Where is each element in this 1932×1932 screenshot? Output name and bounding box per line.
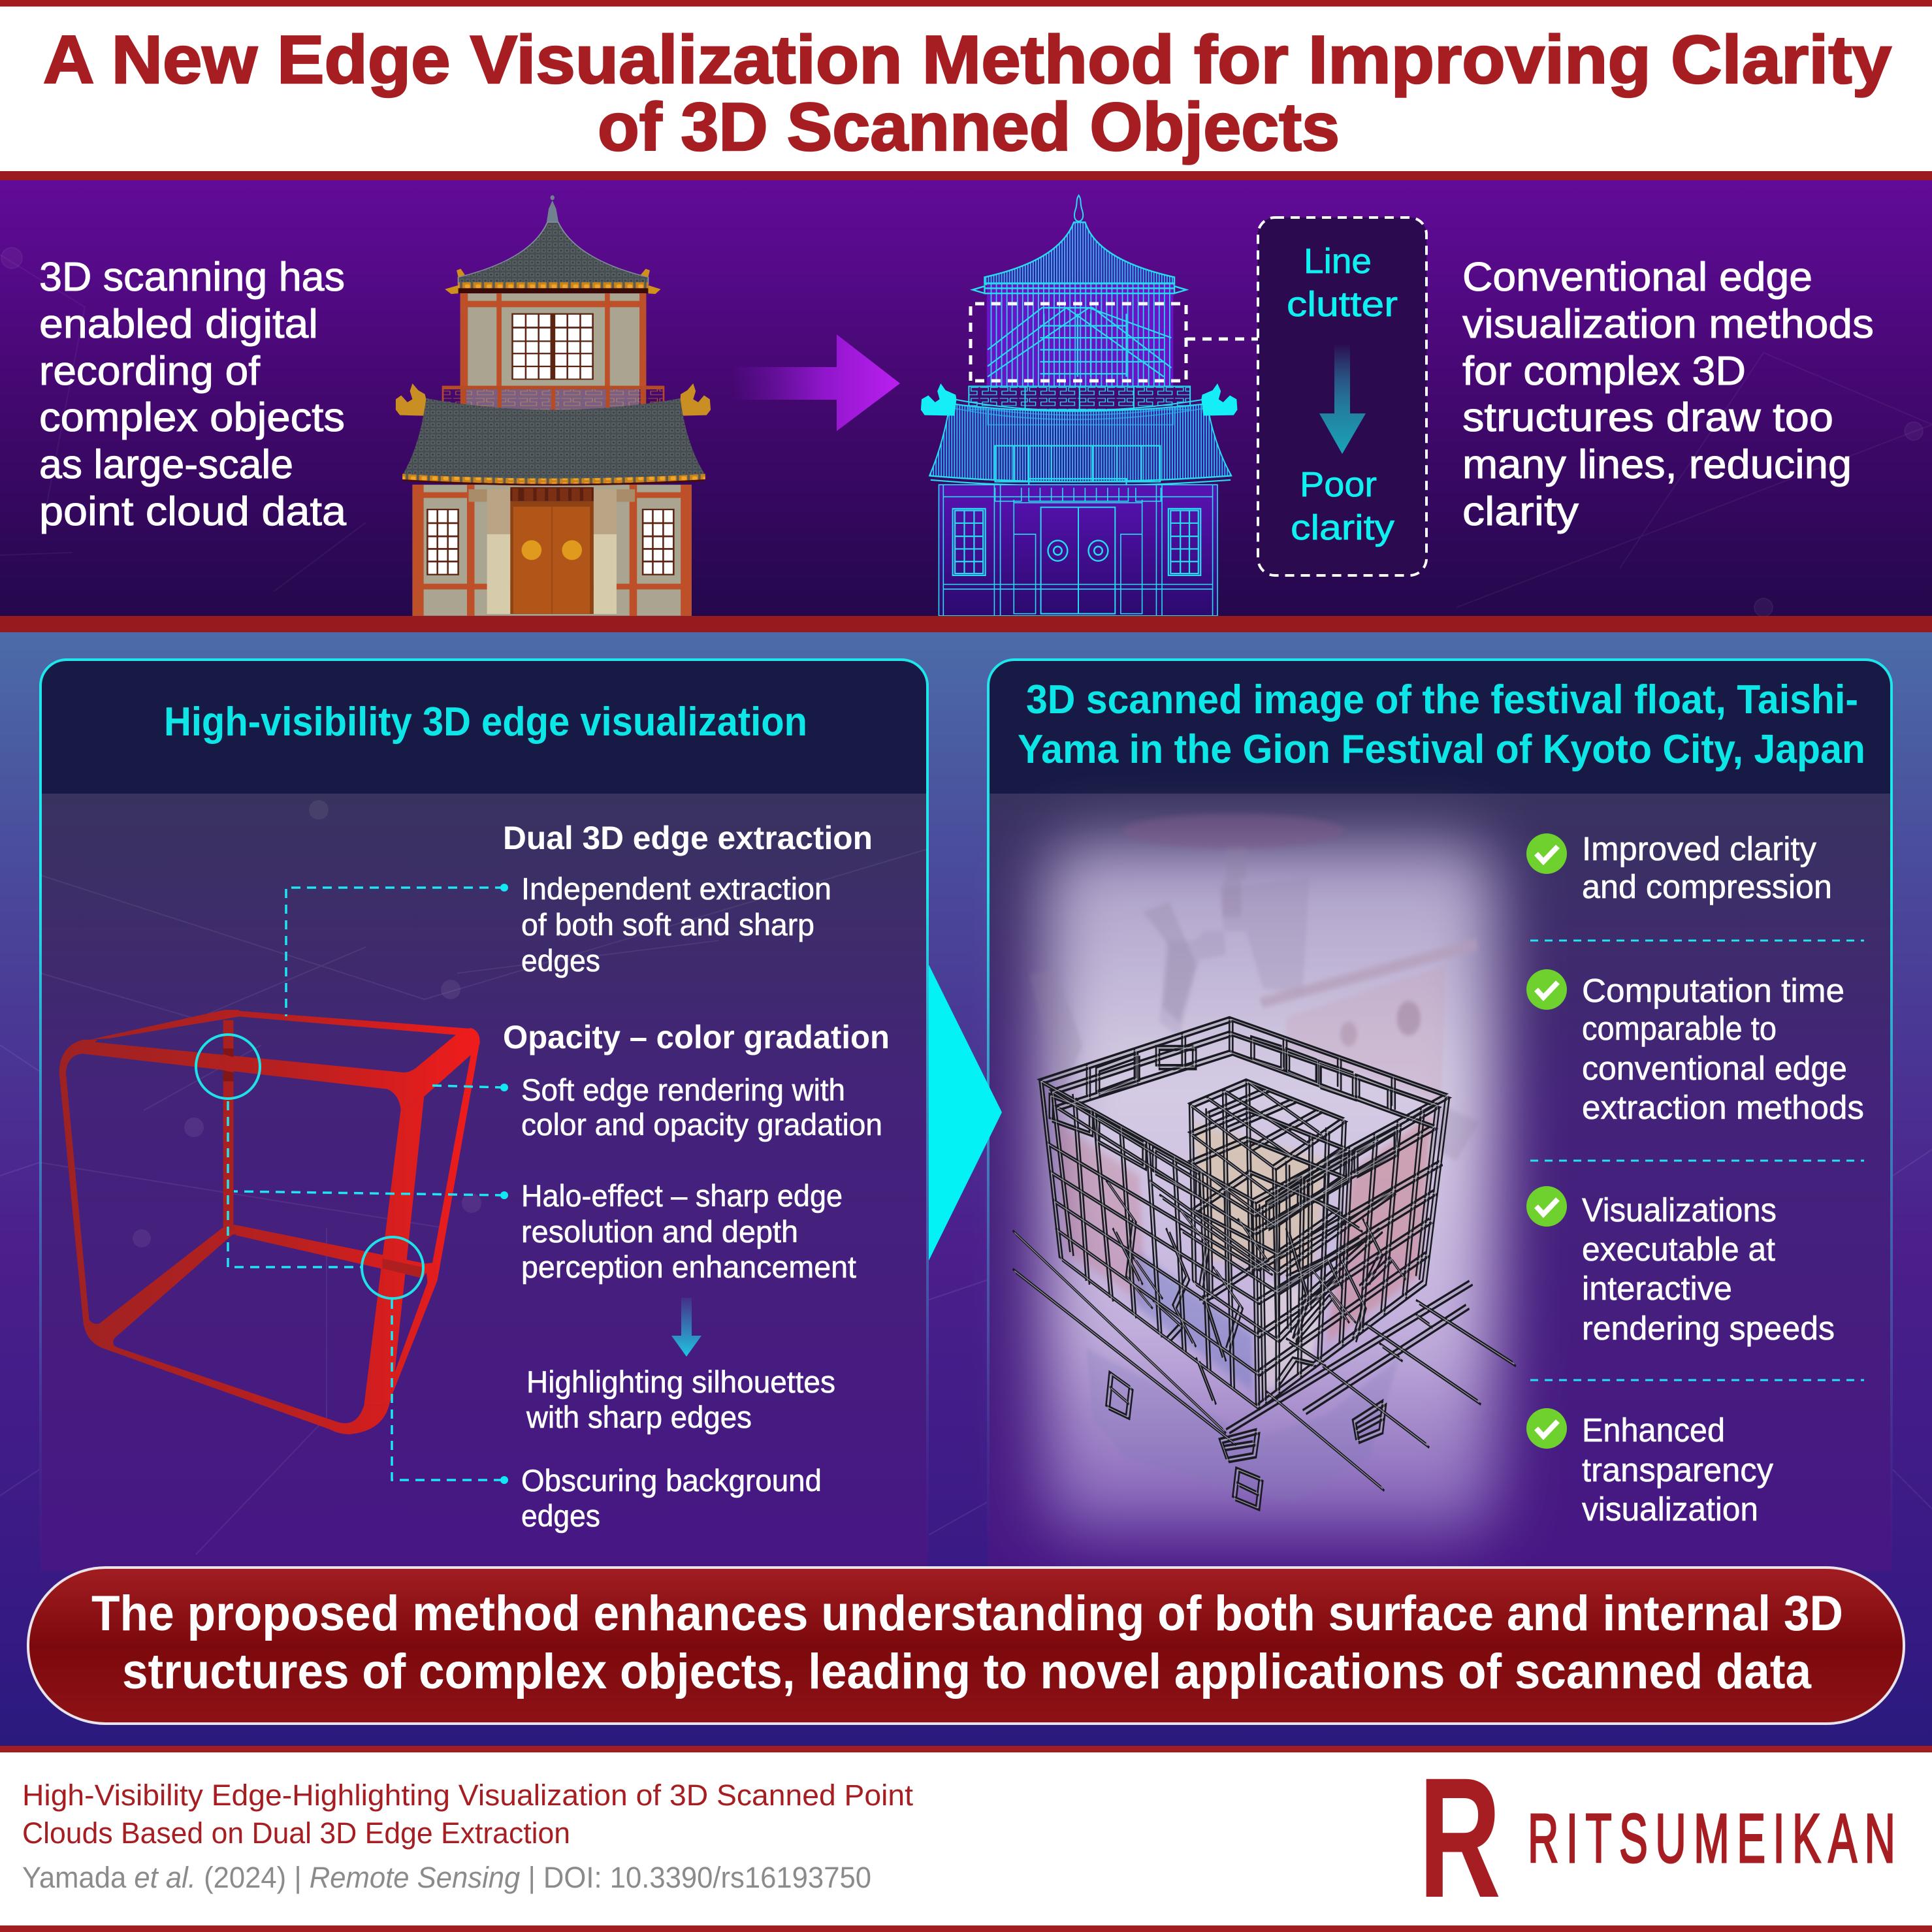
text: intro left: 3D scanning has xyxy=(39,255,345,300)
image: scanned festival float xyxy=(1013,814,1516,1535)
highlight box xyxy=(971,304,1258,381)
text: soft edge xyxy=(521,1072,882,1142)
citation title: High-Visibility Edge-Highlighting Visualization of 3D Scanned Point xyxy=(22,1779,914,1812)
text: soft edge: color and opacity gradation xyxy=(521,1107,882,1142)
text: enhanced transparency: Enhanced xyxy=(1582,1411,1725,1449)
text: independent extraction: Independent extraction xyxy=(521,871,831,906)
title: A New Edge Visualization Method for Improving Clarity xyxy=(43,22,1892,98)
heading: right panel: Yama in the Gion Festival of Kyoto City, Japan xyxy=(1018,727,1865,772)
wire: door ornaments xyxy=(1048,541,1108,561)
ground floor xyxy=(412,485,692,616)
panel: left visualization xyxy=(40,660,927,1571)
text: halo effect: Halo-effect – sharp edge xyxy=(521,1178,843,1213)
icon: wire left dragon xyxy=(921,383,956,416)
upper window xyxy=(511,313,594,379)
text: improved clarity: and compression xyxy=(1582,868,1832,905)
arrow: down xyxy=(1319,344,1366,454)
bottom red stripe xyxy=(0,1925,1932,1932)
icon: upper roof ornaments xyxy=(445,269,661,294)
subheading: opacity: Opacity – color gradation xyxy=(503,1019,890,1055)
left window xyxy=(427,509,459,575)
text: halo effect: resolution and depth xyxy=(521,1214,798,1249)
callout text top: clutter xyxy=(1287,285,1398,324)
panel: right results xyxy=(988,660,1892,1571)
footer stripe xyxy=(0,1746,1932,1752)
text: halo effect: perception enhancement xyxy=(521,1249,856,1284)
icon: check xyxy=(1526,969,1567,1010)
icon: wire right dragon xyxy=(1201,383,1237,416)
callout text bottom xyxy=(1291,465,1394,547)
text: visualizations: Visualizations xyxy=(1582,1191,1777,1229)
text: enhanced transparency xyxy=(1582,1411,1773,1528)
icon: check xyxy=(1526,833,1567,874)
logo: Ritsumeikan: R xyxy=(1419,1742,1501,1932)
text: intro right xyxy=(1462,255,1874,534)
text: independent extraction xyxy=(521,871,831,978)
icon: finial xyxy=(547,195,558,223)
right window xyxy=(642,509,675,575)
text: computation time: conventional edge xyxy=(1582,1050,1847,1087)
leader lines xyxy=(228,884,508,1484)
text: computation time: Computation time xyxy=(1582,972,1844,1009)
text: intro right: clarity xyxy=(1462,489,1579,534)
title: of 3D Scanned Objects xyxy=(598,89,1340,165)
text: intro left: as large-scale xyxy=(39,442,293,487)
text: halo effect xyxy=(521,1178,856,1284)
text: obscuring: Obscuring background xyxy=(521,1463,822,1498)
upper eave band xyxy=(459,282,648,293)
text: intro left: complex objects xyxy=(39,395,345,440)
wire: upper storey xyxy=(973,283,1186,386)
text: intro right: for complex 3D xyxy=(1462,349,1746,394)
callout text bottom: Poor xyxy=(1300,465,1377,504)
icon: check xyxy=(1526,1408,1567,1449)
wire: left window xyxy=(953,509,986,575)
banner text: structures of complex objects, leading to novel applications of scanned data xyxy=(122,1644,1812,1699)
wire: ground floor xyxy=(939,485,1217,616)
header stripe xyxy=(0,171,1932,180)
text: soft edge: Soft edge rendering with xyxy=(521,1072,845,1107)
band divider xyxy=(0,616,1932,632)
icon: bottom highlight ring xyxy=(362,1237,423,1298)
callout text top: Line xyxy=(1304,242,1372,281)
text: intro left: enabled digital xyxy=(39,302,318,347)
text: computation time: comparable to xyxy=(1582,1010,1777,1047)
title xyxy=(43,22,1892,165)
icon: right dragon xyxy=(681,383,711,416)
colored interior xyxy=(1056,1113,1432,1396)
text: intro left xyxy=(39,255,347,534)
text: silhouettes xyxy=(526,1364,835,1434)
text: intro left: recording of xyxy=(39,349,261,394)
text: visualizations xyxy=(1582,1191,1835,1347)
main background xyxy=(0,632,1932,1747)
arrow: halo result xyxy=(671,1298,701,1357)
check item 3 xyxy=(1526,1186,1835,1347)
logo: Ritsumeikan: RITSUMEIKAN xyxy=(1528,1799,1895,1877)
banner text xyxy=(91,1586,1843,1699)
text: obscuring: edges xyxy=(521,1498,600,1533)
text: improved clarity: Improved clarity xyxy=(1582,830,1816,867)
ghost structure xyxy=(1029,814,1479,1502)
banner text: The proposed method enhances understanding of both surface and internal 3D xyxy=(91,1586,1843,1641)
text: intro right: many lines, reducing xyxy=(1462,442,1852,487)
text: visualizations: executable at xyxy=(1582,1231,1775,1268)
callout text top xyxy=(1287,242,1398,324)
citation reference: Yamada et al. (2024) | Remote Sensing | DOI: 10.3390/rs16193750 xyxy=(22,1861,871,1894)
citation title xyxy=(22,1779,914,1850)
icon: door knobs xyxy=(522,540,582,560)
text: computation time: extraction methods xyxy=(1582,1089,1864,1126)
balcony xyxy=(442,386,664,411)
wire: finial xyxy=(1074,195,1083,221)
illustration: traditional building xyxy=(396,195,711,616)
logo: Ritsumeikan xyxy=(1419,1742,1895,1932)
text: visualizations: interactive xyxy=(1582,1270,1732,1307)
text: silhouettes: with sharp edges xyxy=(526,1400,752,1434)
citation title: Clouds Based on Dual 3D Edge Extraction xyxy=(22,1816,570,1850)
subheading: dual extraction: Dual 3D edge extraction xyxy=(503,820,873,856)
top red stripe xyxy=(0,0,1932,7)
check item 2 xyxy=(1526,969,1864,1126)
text: intro right: Conventional edge xyxy=(1462,255,1812,300)
text: independent extraction: of both soft and sharp xyxy=(521,907,814,942)
text: obscuring xyxy=(521,1463,822,1533)
wire: lower roof xyxy=(929,404,1231,486)
banner: conclusion xyxy=(28,1568,1904,1724)
illustration: wireframe building xyxy=(921,195,1237,616)
check item 1 xyxy=(1526,830,1832,905)
text: visualizations: rendering speeds xyxy=(1582,1310,1835,1347)
wire: balcony xyxy=(954,387,1205,425)
heading: left panel: High-visibility 3D edge visualization xyxy=(164,700,807,745)
heading: right panel xyxy=(1018,677,1865,772)
panel: footer xyxy=(0,1742,1932,1932)
upper roof xyxy=(459,222,648,284)
wire: right window xyxy=(1168,509,1200,575)
text: silhouettes: Highlighting silhouettes xyxy=(526,1364,835,1399)
wireframe structure xyxy=(1013,1018,1516,1510)
text: improved clarity xyxy=(1582,830,1832,905)
wire: upper roof xyxy=(984,222,1174,284)
chart: red cube xyxy=(59,1010,480,1434)
check item 4 xyxy=(1526,1408,1773,1528)
entrance xyxy=(487,487,617,614)
icon: left dragon xyxy=(396,383,426,416)
arrow: drawing to wireframe xyxy=(732,334,900,431)
text: intro right: visualization methods xyxy=(1462,302,1874,347)
panel: intro band xyxy=(0,180,1932,617)
text: computation time xyxy=(1582,972,1864,1126)
icon: check xyxy=(1526,1186,1567,1227)
heading: right panel: 3D scanned image of the festival float, Taishi- xyxy=(1026,677,1858,722)
text: enhanced transparency: transparency xyxy=(1582,1451,1773,1489)
text: independent extraction: edges xyxy=(521,943,600,978)
text: intro right: structures draw too xyxy=(1462,395,1833,440)
upper storey walls xyxy=(460,293,646,387)
text: intro left: point cloud data xyxy=(39,489,347,534)
callout: line clutter xyxy=(1258,217,1426,575)
icon: top highlight ring xyxy=(196,1035,260,1099)
arrow: big cyan triangle xyxy=(929,965,1002,1261)
text: enhanced transparency: visualization xyxy=(1582,1490,1758,1528)
callout text bottom: clarity xyxy=(1291,508,1394,547)
glow background xyxy=(1045,843,1496,1535)
lower roof xyxy=(402,398,705,486)
